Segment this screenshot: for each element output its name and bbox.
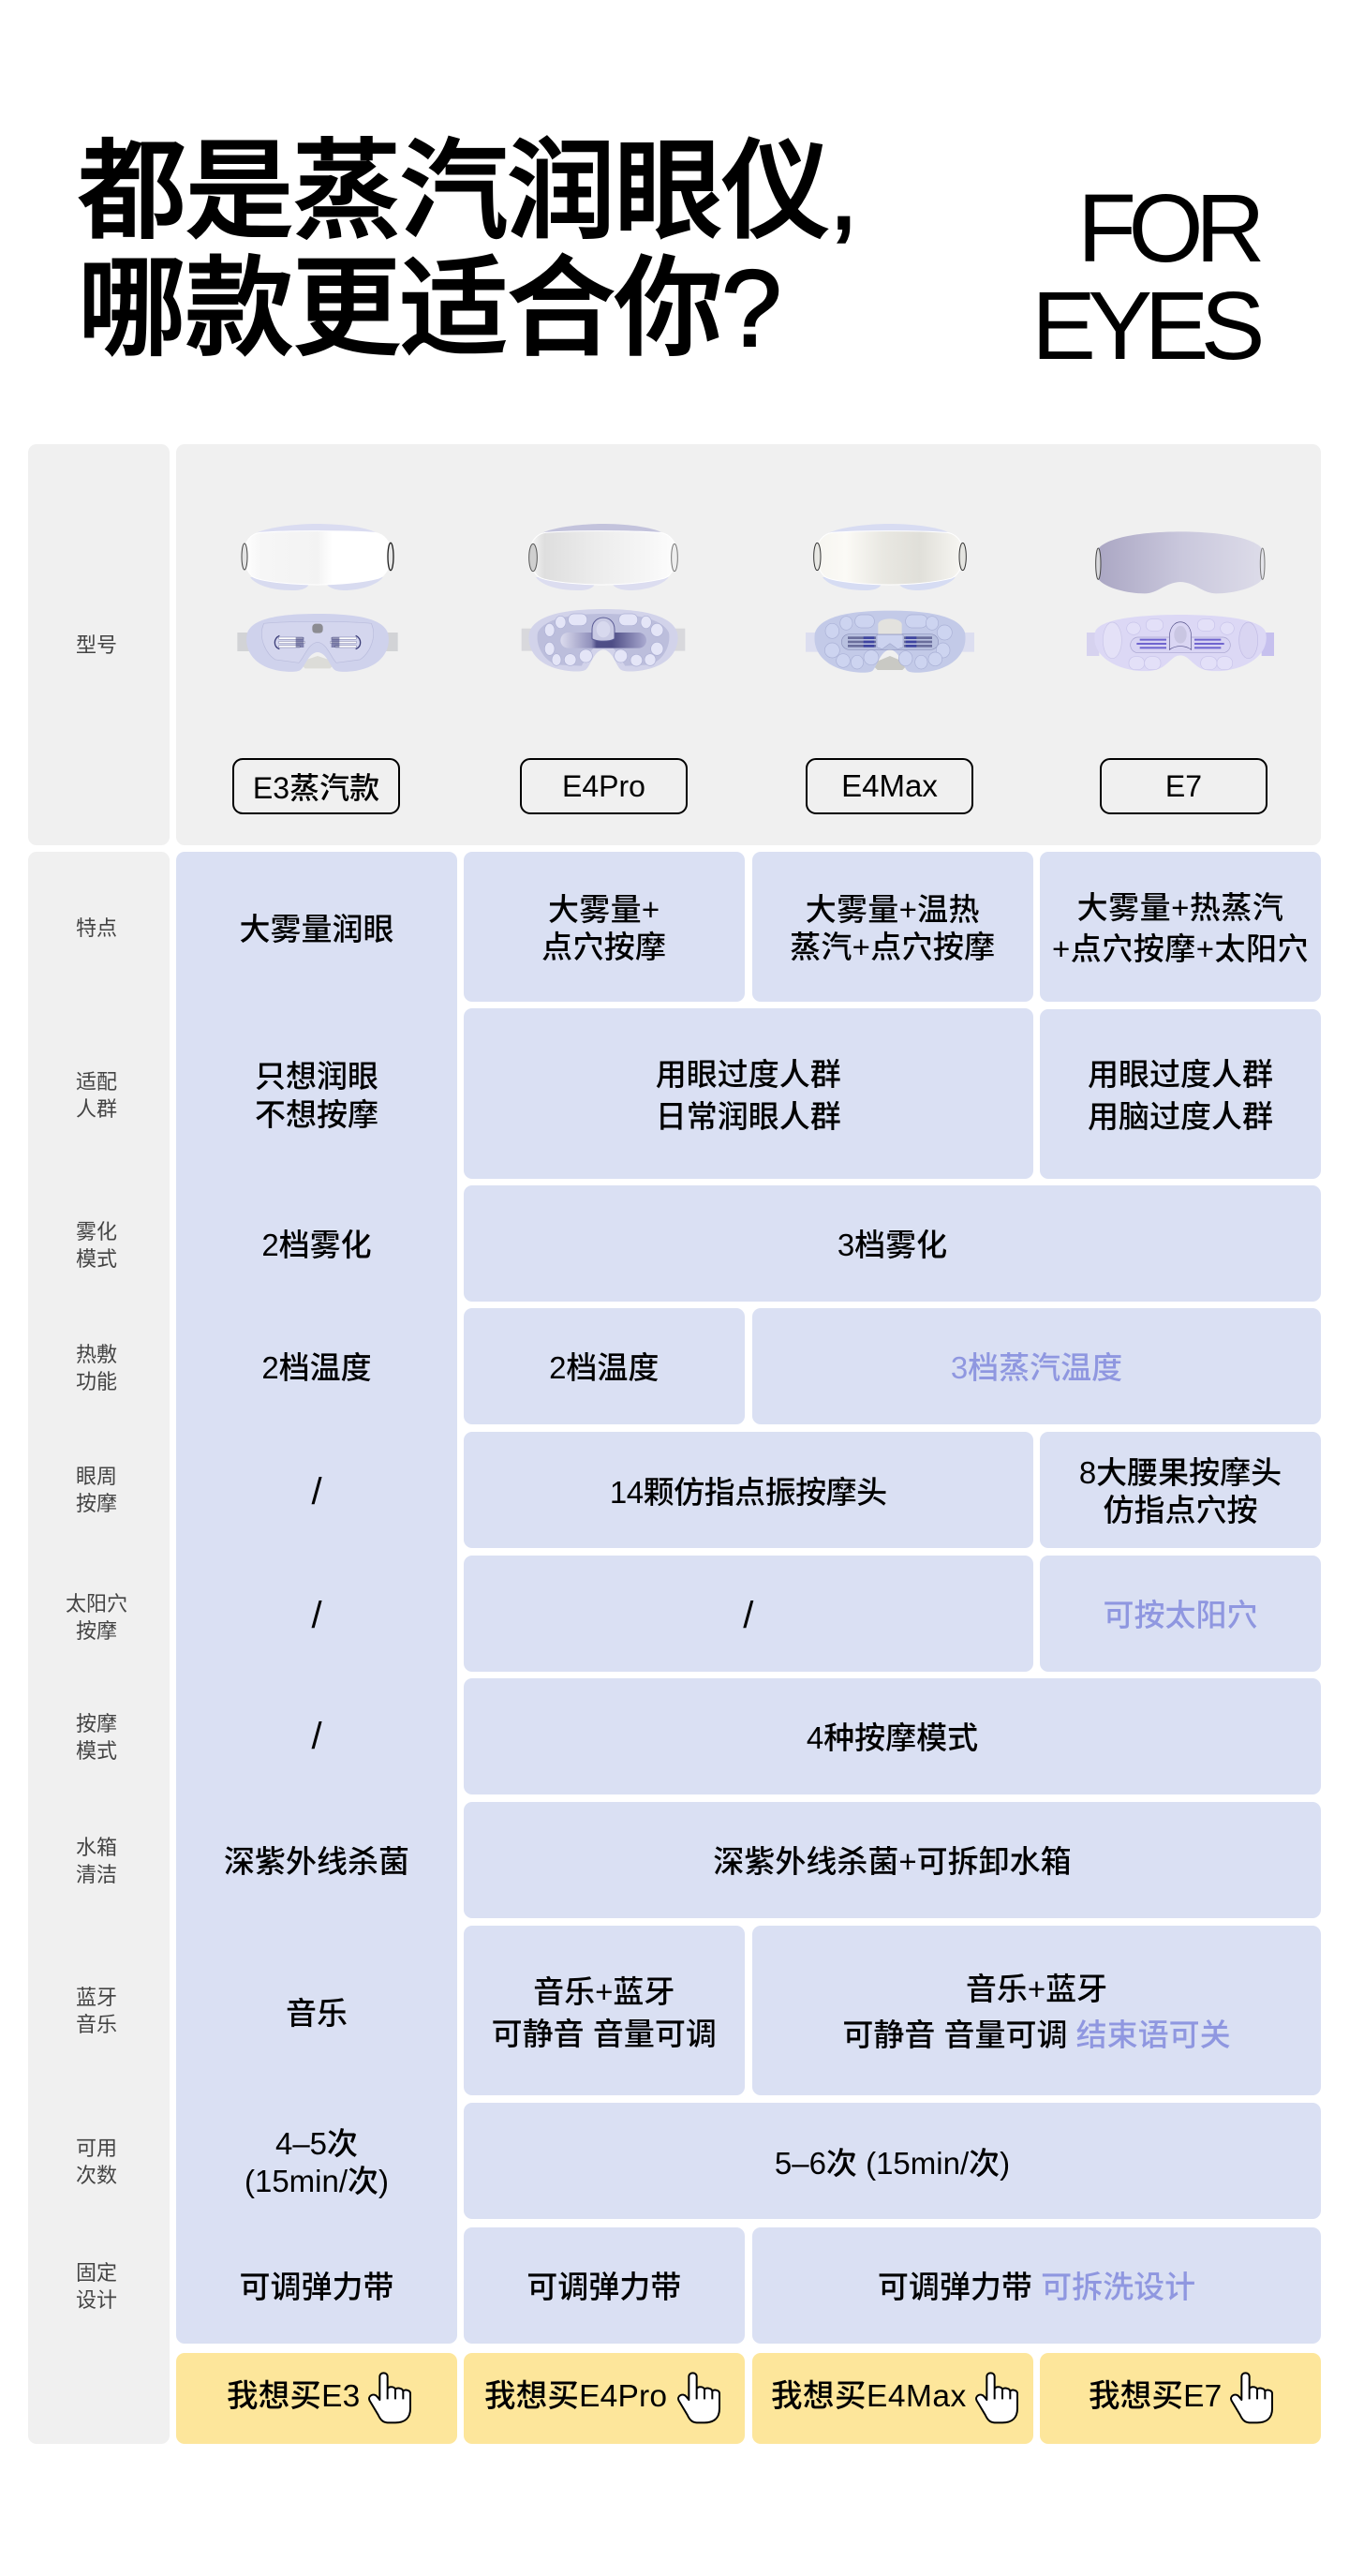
title: 哪款更适合你? [78,247,780,369]
E4Pro audio [464,1926,744,2095]
E4Pro fixing: 可调弹力带 [526,2270,681,2303]
E4Max feature: 大雾量+温热 [806,892,980,926]
label: 水箱清洁 [76,1836,117,1885]
E3 uses: 4–5次 [275,2125,358,2161]
E4Pro feature: 点穴按摩 [541,930,666,963]
label: 固定设计 [76,2261,117,2311]
icon: hand pointer [1230,2372,1273,2423]
E7 audience: 用脑过度人群 [1088,1099,1273,1134]
label: 特点: 特点 [76,916,117,940]
icon: hand pointer [368,2372,411,2423]
model tag: E4Max: E4Max [841,768,938,803]
E4Pro feature [464,852,744,1002]
buy button: E4Pro [464,2353,744,2444]
label: 太阳穴按摩: 太阳穴 [66,1592,127,1616]
label: 按摩模式: 按摩 [76,1712,117,1735]
E4Max and E7 audio: 可静音 音量可调 结束语可关 [842,2018,1231,2052]
massage modes: 4种按摩模式 [807,1720,978,1754]
label: 可用次数 [76,2137,117,2187]
label: 蓝牙音乐: 蓝牙 [76,1986,117,2009]
E7 temple massage [1040,1556,1321,1672]
E4Pro audio: 可静音 音量可调 [492,2017,717,2051]
E7 eye massage [1040,1432,1321,1548]
E7 feature: 大雾量+热蒸汽 [1077,890,1283,924]
uses per tank: 5–6次 (15min/次) [775,2146,1010,2181]
E3 fixing: 可调弹力带 [240,2270,393,2303]
model tag: E4Max [806,758,973,814]
E7 eye massage: 仿指点穴按 [1103,1492,1257,1527]
buy button: E3: 我想买E3 [227,2379,360,2414]
E7 temple massage: 可按太阳穴 [1104,1597,1257,1632]
E3 heat: 2档温度 [261,1349,372,1385]
E3 massage modes: / [311,1716,322,1757]
label: 眼周按摩: 眼周 [76,1465,117,1488]
E7 eye massage: 8大腰果按摩头 [1079,1454,1282,1490]
E4Max and E7 audio: 音乐+蓝牙 [966,1972,1107,2006]
E4Max and E7 heat [752,1308,1321,1424]
label: 可用次数: 可用 [76,2137,117,2160]
E4 eye massage: 14颗仿指点振按摩头 [610,1475,887,1510]
buy button: E7: 我想买E7 [1089,2379,1222,2414]
tank cleaning [464,1802,1321,1918]
label: 太阳穴按摩 [66,1592,127,1642]
model tag: E4Pro: E4Pro [562,768,645,802]
label: 按摩模式 [76,1712,117,1762]
E4Pro feature: 大雾量+ [548,892,660,926]
label: 按摩模式: 模式 [76,1739,117,1762]
label: 热敷功能: 功能 [76,1370,117,1392]
E3 temple massage: / [311,1595,322,1636]
E3 eye massage: / [311,1471,322,1512]
label: 型号: 型号 [76,633,117,657]
label: 热敷功能 [76,1343,117,1392]
label: 可用次数: 次数 [76,2163,117,2187]
E3 audio: 音乐 [286,1996,348,2030]
E3 uses [245,2125,389,2198]
brand wordmark: FOR EYES: EYES [1031,272,1257,380]
mist modes: 3档雾化 [838,1228,947,1261]
label: 眼周按摩: 按摩 [76,1492,117,1514]
product: E4Pro [522,524,685,671]
model tag: E4Pro [520,758,688,814]
icon: hand pointer [975,2372,1018,2423]
label: 适配人群 [76,1070,117,1121]
label: 太阳穴按摩: 按摩 [76,1619,117,1642]
E3 mist: 2档雾化 [261,1228,372,1261]
E7 audience [1040,1009,1321,1179]
E4Max and E7 fixing: 可调弹力带 可拆洗设计 [878,2270,1195,2303]
product: E7 [1087,531,1274,671]
label: 水箱清洁: 清洁 [76,1863,117,1885]
E4 temple massage [464,1556,1032,1672]
uses per tank [464,2103,1321,2219]
model tag: E3 [232,758,400,814]
buy button: E3 [176,2353,457,2444]
model tag: E7 [1100,758,1267,814]
E4Max feature [752,852,1032,1002]
label: 雾化模式: 模式 [76,1246,117,1271]
E3 audience: 不想按摩 [255,1096,378,1132]
label: 热敷功能: 热敷 [76,1343,117,1366]
label: 蓝牙音乐: 音乐 [76,2013,117,2035]
E4 audience: 日常润眼人群 [656,1098,841,1134]
massage modes [464,1678,1321,1794]
label column: model [28,444,170,845]
E3 tank cleaning: 深紫外线杀菌 [224,1844,409,1878]
E4Pro heat [464,1308,744,1424]
E4Pro fixing [464,2227,744,2344]
E4Pro heat: 2档温度 [549,1349,659,1385]
label: 雾化模式: 雾化 [76,1220,117,1243]
E3 uses: (15min/次) [245,2163,389,2198]
buy button: E4Max [752,2353,1032,2444]
label: 雾化模式 [76,1220,117,1271]
E3 feature: 大雾量润眼 [240,912,393,946]
title: 都是蒸汽润眼仪, [78,130,857,252]
E4Pro audio: 音乐+蓝牙 [533,1974,674,2009]
model tag: E7: E7 [1165,768,1202,802]
label: 水箱清洁: 水箱 [76,1836,117,1859]
panel: product models [176,444,1321,845]
label: 适配人群: 适配 [76,1070,117,1094]
E4Max and E7 fixing [752,2227,1321,2344]
brand wordmark: FOR EYES [1031,174,1261,380]
E4 temple massage: / [743,1595,753,1636]
mist modes [464,1185,1321,1302]
E7 audience: 用眼过度人群 [1088,1057,1273,1092]
label: 固定设计: 固定 [76,2261,117,2285]
buy button: E4Pro: 我想买E4Pro [484,2379,667,2414]
E3 audience [255,1059,378,1132]
label column: features [28,852,170,2444]
E4 eye massage [464,1432,1032,1548]
E4Max and E7 audio [752,1926,1321,2095]
tank cleaning: 深紫外线杀菌+可拆卸水箱 [713,1844,1072,1878]
buy button: E7 [1040,2353,1321,2444]
E4Max feature: 蒸汽+点穴按摩 [790,930,995,963]
E4Max and E7 heat: 3档蒸汽温度 [951,1349,1122,1385]
product: E3 steam [237,524,398,672]
model tag: E3: E3蒸汽款 [253,771,379,805]
label: 蓝牙音乐 [76,1986,117,2035]
column: E3 specs [176,852,457,2344]
E7 feature [1040,852,1321,1002]
E4 audience: 用眼过度人群 [656,1057,841,1091]
label: 固定设计: 设计 [76,2288,117,2311]
icon: hand pointer [677,2372,720,2423]
brand wordmark: FOR EYES: FOR [1077,174,1257,282]
label: 适配人群: 人群 [76,1096,117,1121]
title [78,130,857,369]
buy button: E4Max: 我想买E4Max [771,2379,967,2414]
E7 feature: +点穴按摩+太阳穴 [1052,931,1309,965]
label: 眼周按摩 [76,1465,117,1514]
E4 audience [464,1008,1032,1179]
product: E4Max [806,524,974,673]
E3 audience: 只想润眼 [255,1059,378,1093]
